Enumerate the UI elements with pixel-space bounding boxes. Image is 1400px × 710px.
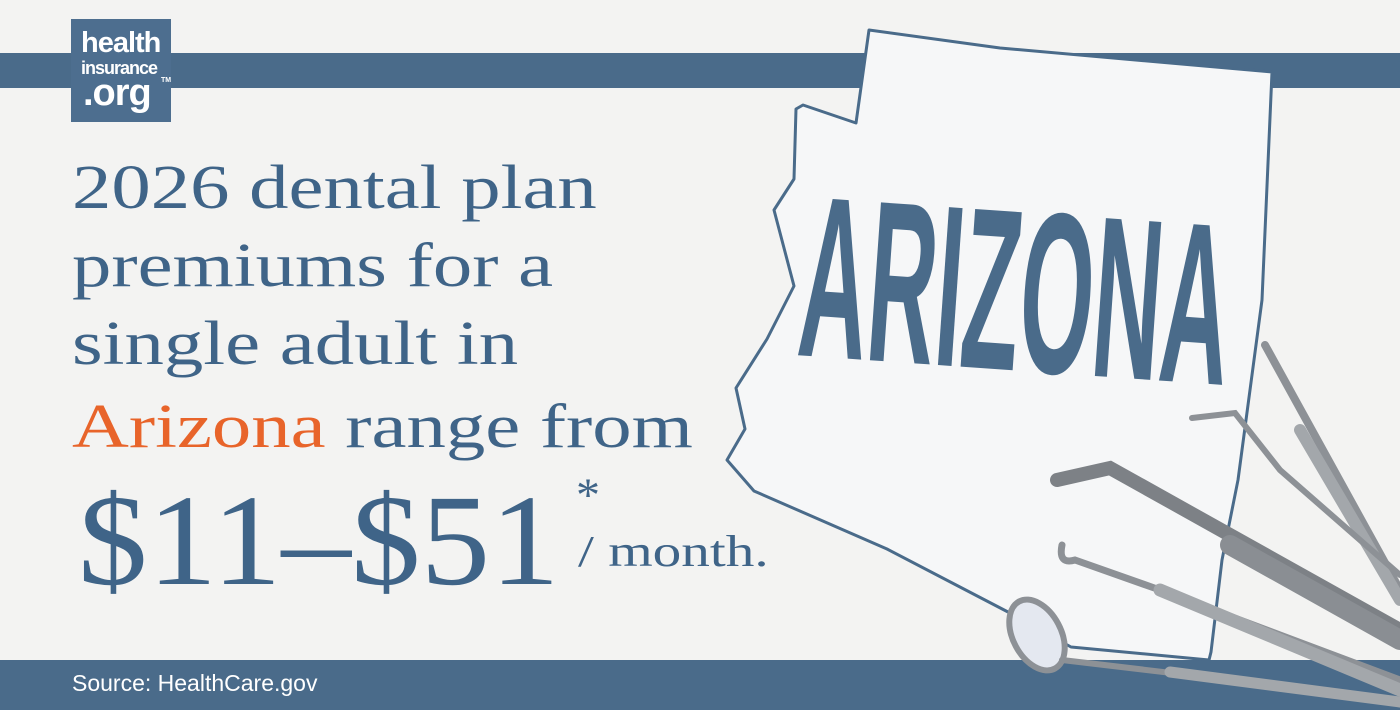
logo: health [81,27,160,59]
headline: / month. [578,527,769,576]
logo [71,19,171,122]
price: $11–$51 [78,469,560,613]
map: Arizona outline [727,30,1272,660]
headline [72,154,769,613]
logo: TM [161,77,171,84]
headline: 2026 dental plan [72,154,597,222]
top bar [0,53,1400,88]
bottom bar [0,660,1400,710]
headline: * [576,469,600,522]
headline: premiums for a [72,232,553,300]
icon: dental instruments [998,345,1400,702]
logo: .org [83,72,151,114]
source text: Source: HealthCare.gov [72,670,317,696]
headline: single adult in [72,310,518,378]
logo: insurance [81,58,157,78]
headline: Arizona range from [72,393,693,461]
